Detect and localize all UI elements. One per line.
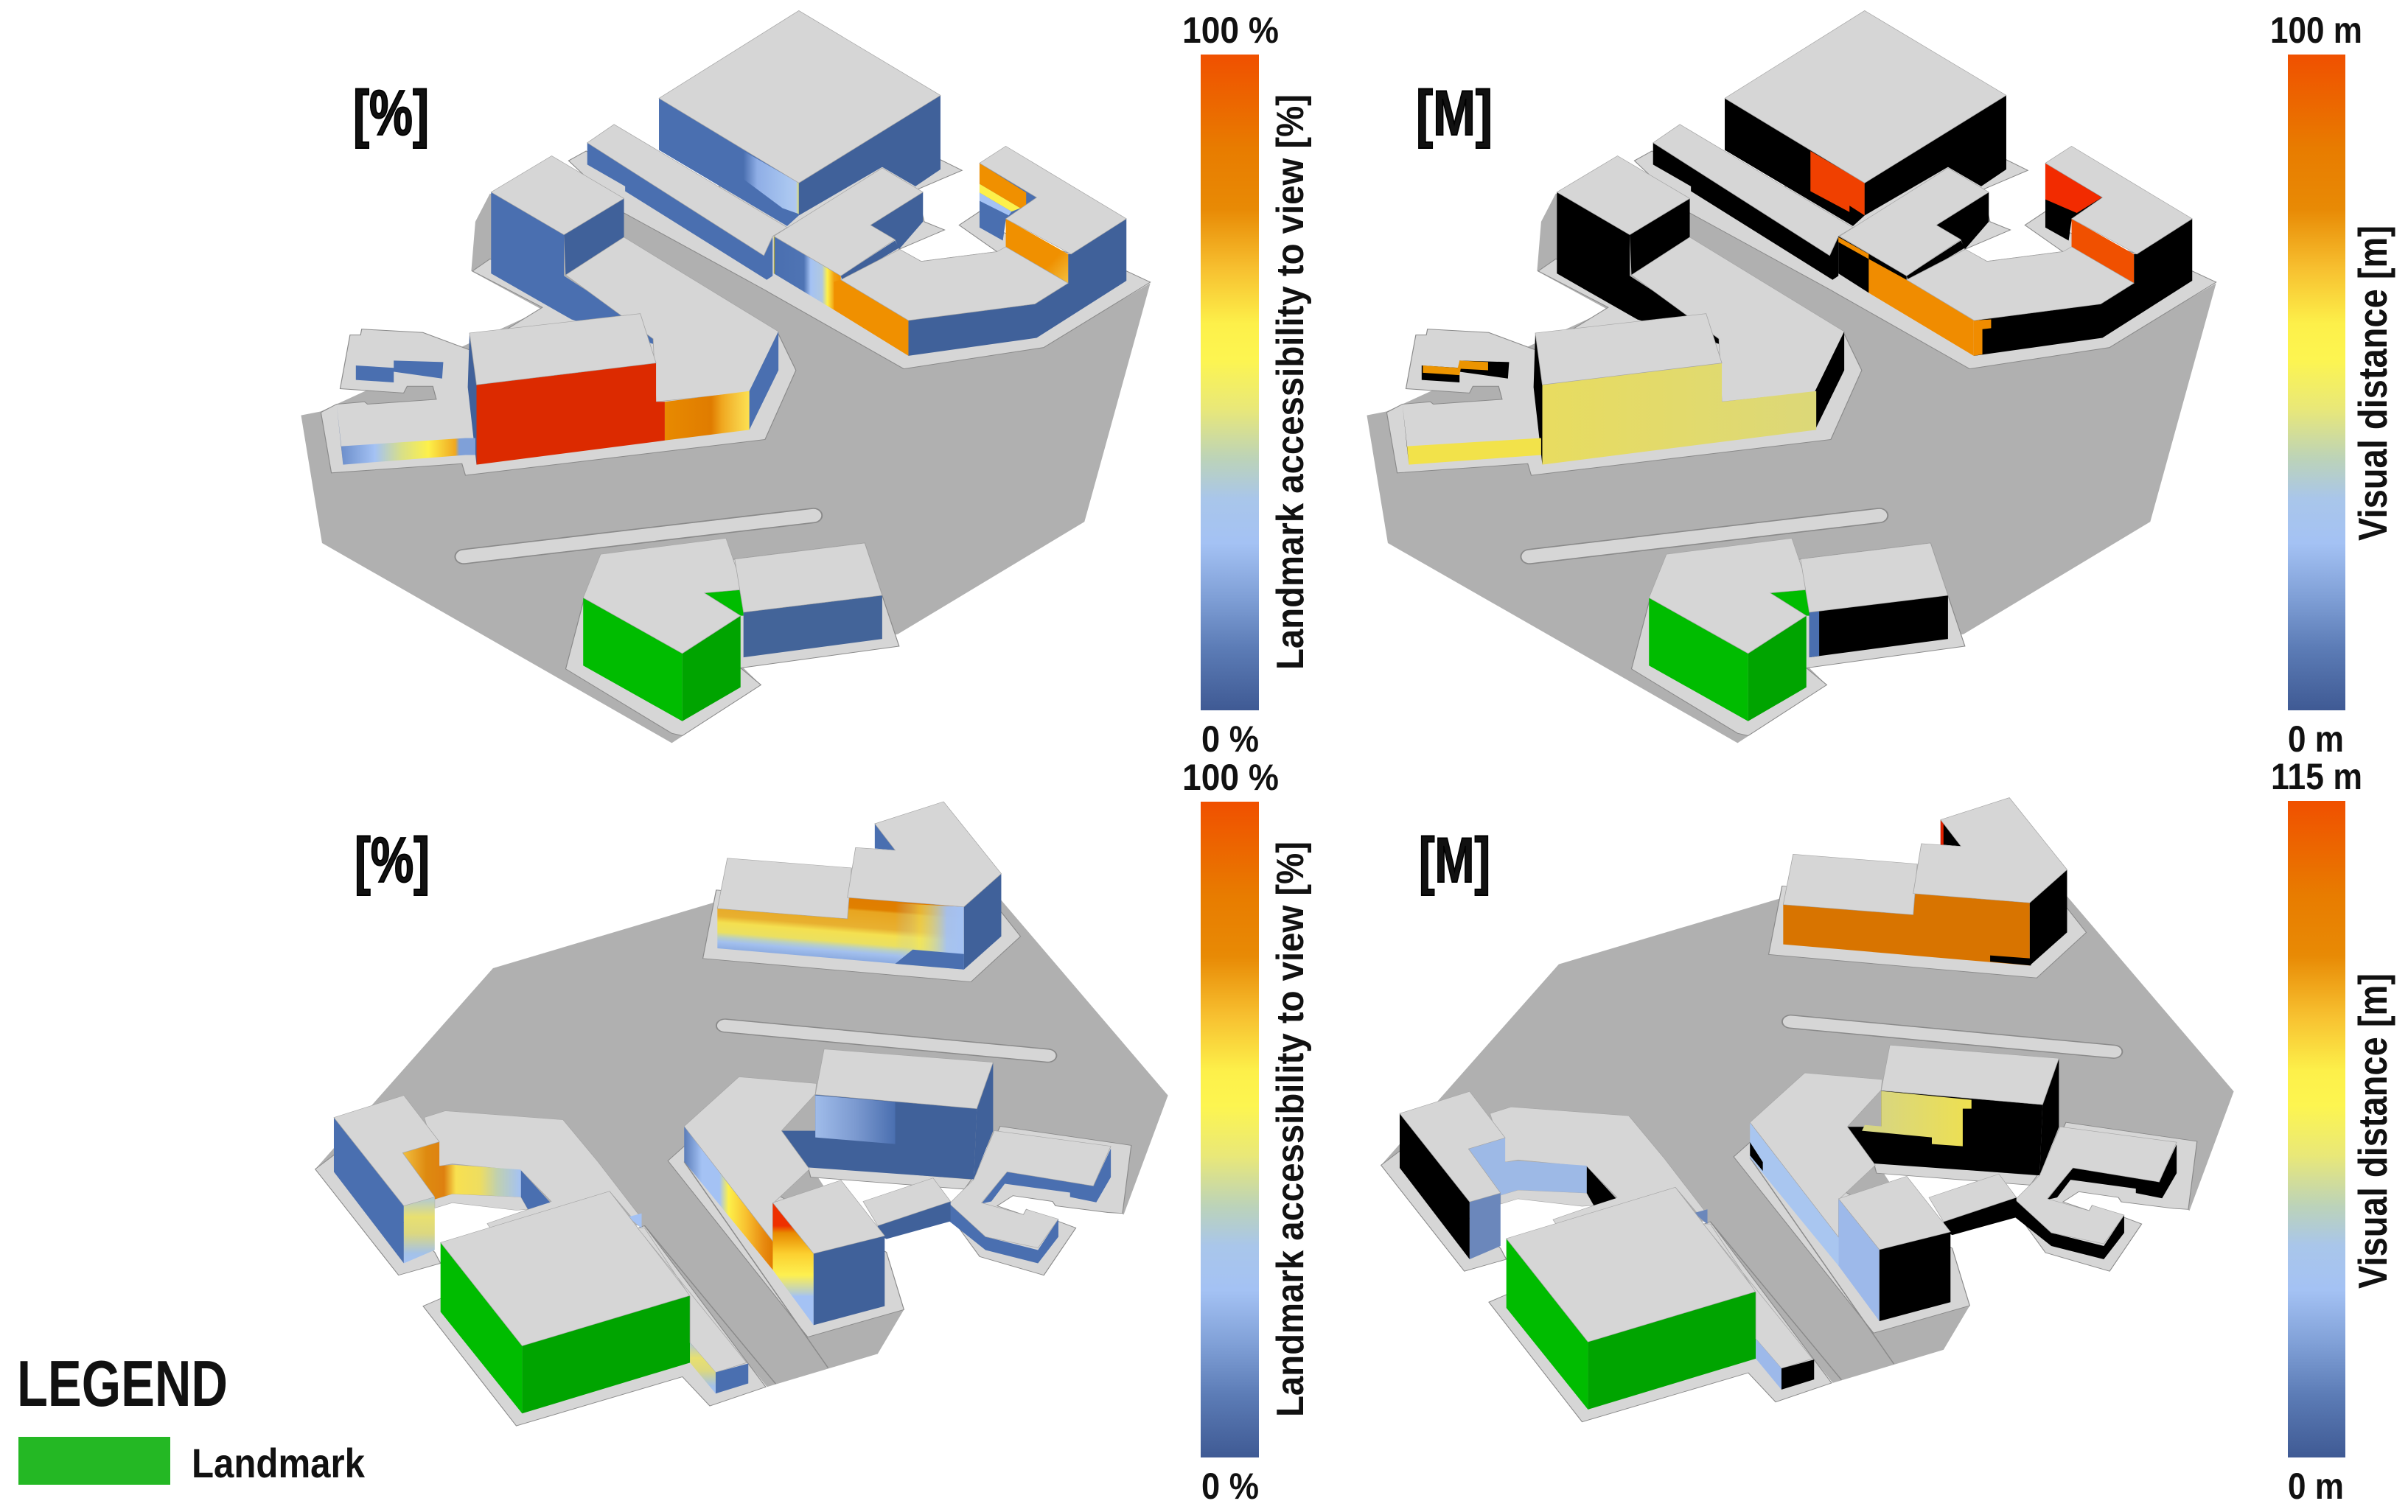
site model 2 [1367, 10, 2216, 743]
scale minimum: 0 m [2288, 718, 2344, 760]
U-shaped building [1868, 146, 2192, 356]
panel: visual distance, view 2 [1381, 756, 2395, 1507]
centre building with heat walls [684, 1077, 884, 1325]
left building and wing [491, 156, 778, 430]
left building and wing [1557, 156, 1844, 430]
small rear-left building [1403, 360, 1541, 465]
large block [659, 10, 940, 226]
colour scale [1201, 55, 1259, 710]
scale title: Landmark accessibility to view [%] [1269, 841, 1312, 1417]
legend heading: LEGEND [17, 1347, 228, 1420]
scale minimum: 0 % [1201, 718, 1259, 760]
panel label: [M] [1416, 78, 1493, 149]
landmark building [441, 1191, 690, 1413]
small rear-left building [337, 360, 475, 465]
panel: landmark accessibility, view 1 [301, 10, 1312, 760]
large block [1725, 10, 2006, 226]
landmark building [1507, 1187, 1756, 1410]
top building [1783, 798, 2067, 965]
long strip building [587, 125, 787, 280]
top building [717, 802, 1001, 970]
scale maximum: 100 % [1182, 10, 1279, 51]
scale title: Visual distance [m] [2350, 225, 2395, 541]
scale maximum: 100 % [1182, 757, 1279, 798]
pavement [321, 151, 1151, 735]
small front building [1703, 1224, 1814, 1390]
courtyard block [774, 168, 923, 309]
long strip building [1653, 125, 1853, 280]
site model 4 [1381, 798, 2234, 1422]
bridge [863, 1178, 951, 1239]
right-hand small building [949, 1131, 1111, 1263]
ground [315, 899, 1168, 1387]
tall centre building [1847, 1045, 2059, 1175]
U-shaped building [834, 146, 1126, 356]
panel: landmark accessibility, view 2 [315, 757, 1312, 1507]
pavement [1381, 886, 2197, 1422]
landmark building [1649, 538, 1810, 721]
panel label: [%] [355, 825, 430, 896]
small front building [638, 1228, 748, 1393]
scale maximum: 115 m [2271, 756, 2362, 797]
ground [301, 194, 1151, 743]
pavement [315, 890, 1131, 1426]
site model 3 [315, 802, 1168, 1426]
site model 1 [301, 10, 1151, 743]
ground [1381, 895, 2234, 1383]
tall centre building [781, 1049, 993, 1180]
scale minimum: 0 % [1201, 1466, 1259, 1507]
front building, red wall [468, 314, 750, 465]
panel label: [M] [1419, 825, 1490, 896]
rear building beside landmark [1801, 543, 1948, 657]
scale maximum: 100 m [2270, 10, 2362, 51]
front building, yellow wall [1534, 314, 1816, 465]
scale minimum: 0 m [2288, 1466, 2344, 1507]
legend swatch: landmark [18, 1437, 170, 1485]
scale title: Landmark accessibility to view [%] [1269, 94, 1312, 670]
left-hand U building [1400, 1091, 1708, 1259]
ground [1367, 194, 2216, 743]
colour scale [1201, 802, 1259, 1457]
rear building beside landmark [735, 543, 882, 657]
legend [17, 1347, 366, 1486]
panel label: [%] [353, 78, 429, 149]
right-hand small building [2015, 1127, 2177, 1259]
landmark building [583, 538, 744, 721]
colour scale [2288, 55, 2345, 710]
legend label: Landmark [192, 1440, 366, 1486]
pavement [1386, 151, 2216, 735]
scale title: Visual distance [m] [2350, 973, 2395, 1289]
centre building with light-blue walls [1750, 1073, 1950, 1321]
panel: visual distance, view 1 [1367, 10, 2395, 760]
colour scale [2288, 801, 2345, 1457]
bridge [1929, 1174, 2017, 1235]
courtyard block [1838, 168, 1989, 293]
left-hand U building [334, 1096, 642, 1263]
